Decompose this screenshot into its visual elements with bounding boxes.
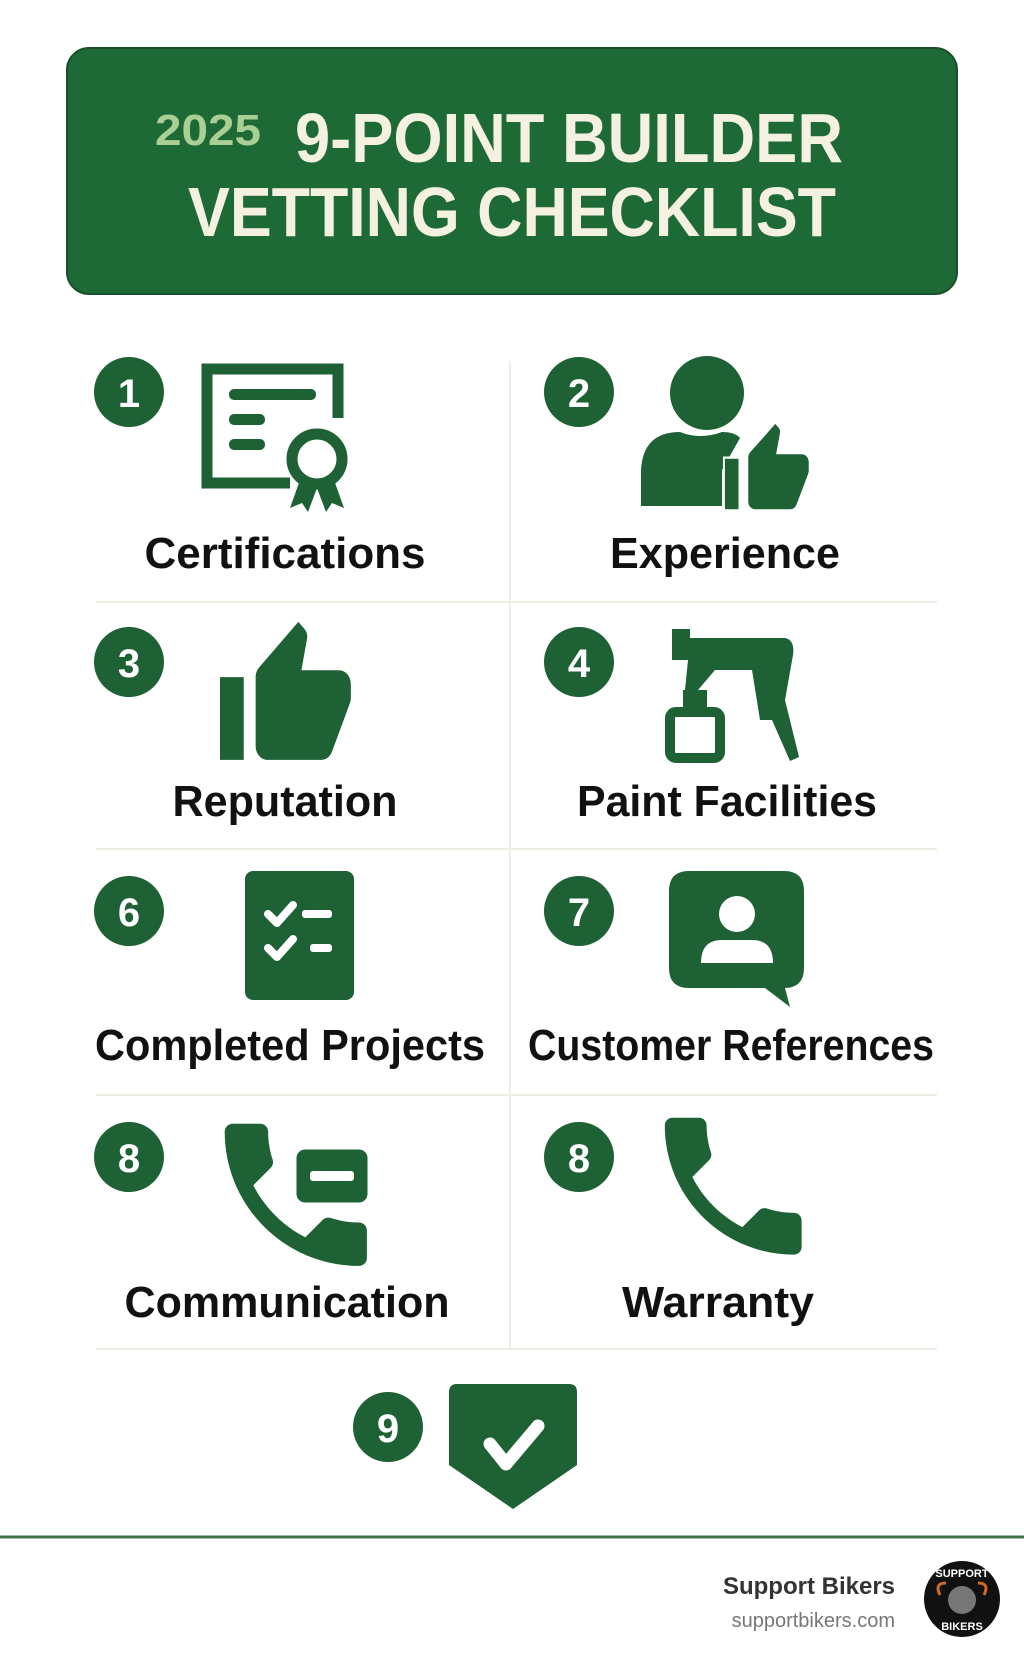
item 4: paint facilities: Paint Facilities xyxy=(577,777,877,826)
item 8: communication: 8 xyxy=(118,1137,140,1181)
footer logo: BIKERS xyxy=(941,1621,983,1633)
footer logo: SUPPORT xyxy=(935,1568,989,1580)
title banner: VETTING CHECKLIST xyxy=(188,173,836,251)
item 2: experience: 2 xyxy=(568,372,590,416)
item 2: experience xyxy=(544,356,840,578)
item 7: customer references: Customer References xyxy=(528,1021,934,1070)
item 8: communication: Communication xyxy=(124,1278,450,1327)
item 6: completed projects xyxy=(94,871,485,1070)
item 8: warranty: Warranty xyxy=(622,1278,815,1327)
title banner: 9-POINT BUILDER xyxy=(295,99,843,177)
item 3: reputation: 3 xyxy=(118,642,140,686)
footer brand text: supportbikers.com xyxy=(732,1610,895,1632)
item 4: paint facilities xyxy=(544,627,877,826)
title banner xyxy=(67,48,957,294)
item 7: customer references: 7 xyxy=(568,891,590,935)
item 8: communication xyxy=(94,1122,450,1327)
footer logo xyxy=(924,1561,1000,1637)
footer brand text xyxy=(723,1573,895,1632)
item 9: shield check xyxy=(353,1384,577,1509)
item 3: reputation: Reputation xyxy=(172,777,398,826)
item 4: paint facilities: 4 xyxy=(568,642,591,686)
item 1: certifications xyxy=(94,357,426,578)
footer brand text: Support Bikers xyxy=(723,1573,895,1600)
item 6: completed projects: 6 xyxy=(118,891,140,935)
item 9: shield check: 9 xyxy=(377,1407,399,1451)
item 6: completed projects: Completed Projects xyxy=(95,1021,485,1070)
item 1: certifications: 1 xyxy=(118,372,140,416)
item 1: certifications: Certifications xyxy=(144,529,426,578)
item 3: reputation xyxy=(94,622,398,826)
title banner: 2025 xyxy=(155,106,261,155)
item 8: warranty: 8 xyxy=(568,1137,590,1181)
item 8: warranty xyxy=(544,1118,815,1327)
item 2: experience: Experience xyxy=(610,529,840,578)
item 7: customer references xyxy=(528,871,934,1070)
